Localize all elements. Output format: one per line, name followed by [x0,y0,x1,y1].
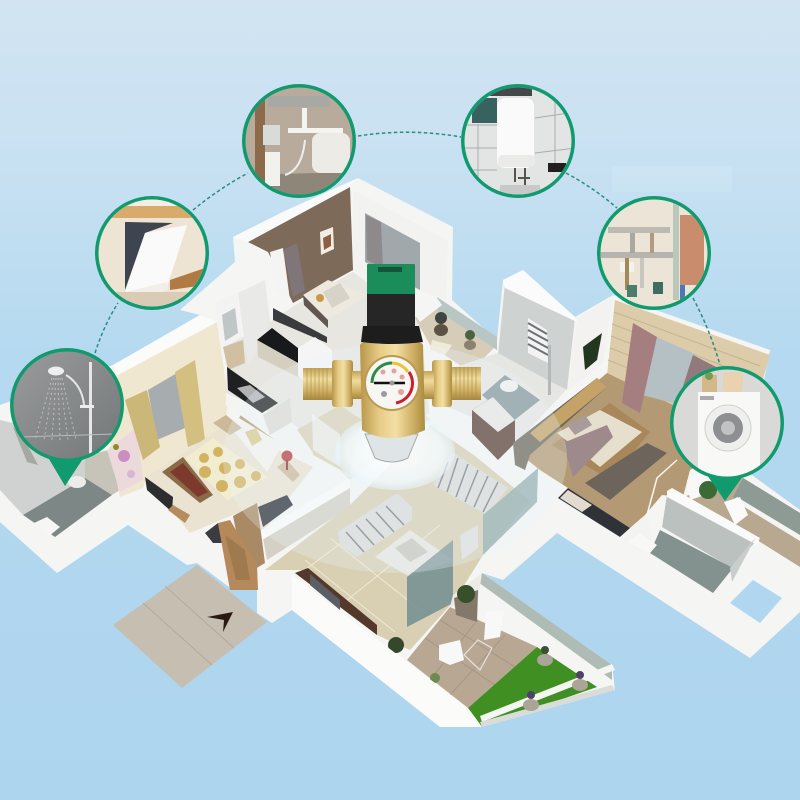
callout: shower [10,348,125,486]
brass body [360,341,425,438]
outer white shell of the apartment [0,178,800,727]
entrance mat [113,565,267,688]
dashed connector lines [95,132,720,365]
callout: pipe manifold [597,196,712,311]
left hex nut [332,360,353,407]
right bathroom [430,270,613,460]
sofa right [433,452,508,515]
pointer [705,472,746,501]
green cap [367,264,415,294]
pressure reducing valve [303,264,481,462]
clear filter bowl [365,434,418,462]
pale patch in sky [612,166,732,192]
balcony behind valve [415,297,497,372]
kitchen [215,272,430,480]
top bedroom [233,178,448,328]
black cylinder [367,290,415,326]
right bedroom [513,300,770,528]
icon: entrance arrow [207,612,233,632]
coffee table [375,530,453,577]
TV wall [295,568,377,635]
apartment floor plan [0,178,800,727]
glass partitions [407,468,538,627]
callout: water heater [461,84,576,200]
terrace [388,573,615,727]
door [218,503,265,590]
callout: dishwasher [95,196,210,312]
right hex nut [432,360,452,407]
outer wall front [292,575,482,727]
right thread [452,367,481,400]
callout: under-sink filter [242,84,357,200]
pressure gauge [364,355,420,411]
right wing and lower bathroom [558,470,800,623]
living room back wall [425,412,540,505]
sofa left [338,493,412,557]
left bathroom [0,420,120,537]
left bedroom [107,315,350,560]
horizontal arm [352,371,434,399]
black hex collar [361,326,423,344]
left thread [303,368,332,400]
pointer [46,454,86,486]
callout: washing machine [670,366,785,501]
living room floor [265,425,535,650]
translucent water glow [223,343,567,573]
